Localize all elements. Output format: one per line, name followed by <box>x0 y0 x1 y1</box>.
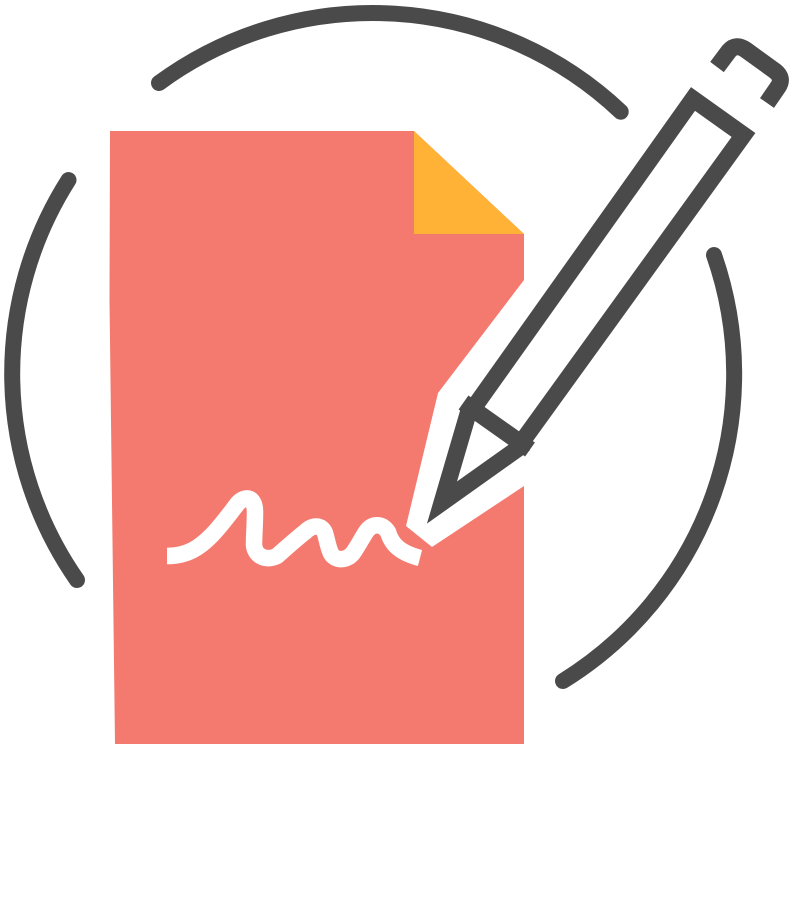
signature <box>167 498 420 559</box>
pen nib <box>442 407 525 502</box>
circular arc: right <box>563 255 734 681</box>
pen <box>442 47 780 502</box>
document page <box>110 131 524 744</box>
pen crossbar <box>464 402 530 450</box>
pen body <box>474 99 744 443</box>
circular arc: left <box>12 180 77 580</box>
pen clip <box>717 47 780 103</box>
document folded corner <box>414 131 524 234</box>
circular arc: top <box>159 13 621 112</box>
